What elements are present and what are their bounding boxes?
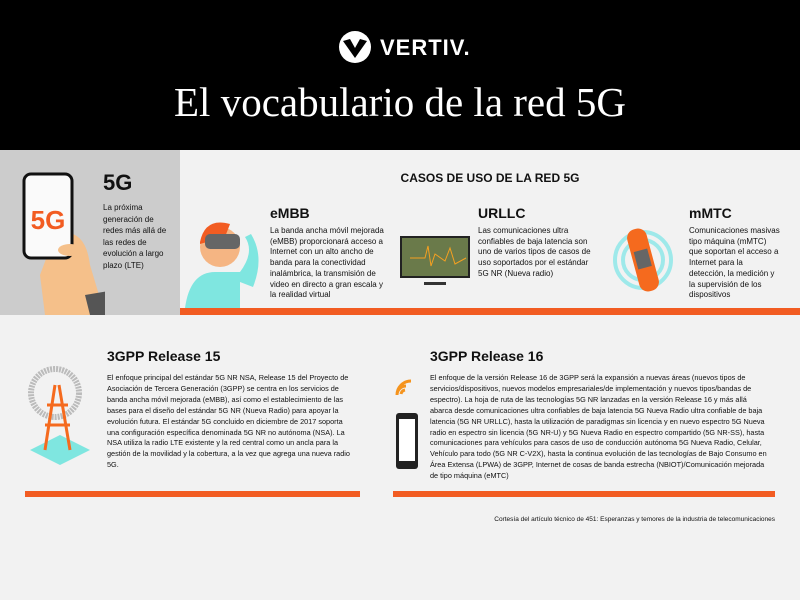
heading: casos: CASOS DE USO DE LA RED 5G — [401, 171, 579, 185]
heading: 5G: 5G — [103, 170, 132, 195]
heading: 3GPP Release 16 — [430, 348, 543, 364]
icon: car with signal rings — [613, 228, 673, 292]
block: eMBB: La banda ancha móvil mejorada (eMBB) proporcionará acceso a Internet con un alto ancho de banda para la conectividad inalámbrica, la transmisión de video en directo a gran escala y la realidad virtual — [270, 226, 384, 299]
header — [0, 0, 800, 150]
text: 5G: La próxima generación de redes más allá de las redes de evolución a largo plazo (LTE) — [103, 203, 166, 270]
heading: 3GPP Release 15 — [107, 348, 220, 364]
text: El enfoque principal del estándar 5G NR NSA, Release 15 del Proyecto de Asociación de Tercera Generación (3GPP) se centra en los servicios de banda ancha móvil mejorada (eMBB), así como el establecimiento de las bases para el diseño del estándar 5G NR (Nueva Radio) para apoyar la evolución futura. El estándar 5G concluido en diciembre de 2017 soporta una configuración específica denominada 5G NR no autónoma (NSA). La NSA utiliza la radio LTE existente y la red central como un ancla para la gestión de la movilidad y la cobertura, a la vez que agrega una nueva radio 5G. — [107, 373, 350, 469]
block: URLLC: URLLC — [478, 205, 525, 221]
block: mMTC: Comunicaciones masivas tipo máquina (mMTC) que soportan el acceso a Internet para la detección, la medición y la supervisión de los dispositivos — [689, 226, 780, 299]
panel: casos de uso — [185, 171, 780, 308]
logo: VERTIV. — [380, 35, 471, 60]
panel: 5G — [0, 150, 180, 315]
panel: release 16 — [393, 348, 775, 497]
text: El enfoque de la versión Release 16 de 3GPP será la expansión a nuevas áreas (nuevos tipos de servicios/dispositivos, nuevos modelos empresariales/de implementación y nuevos tipos/bandas de espectro). La hoja de ruta de las tecnologías 5G NR lanzadas en la versión Release 16 y más allá abarca desde comunicaciones ultra confiables de baja latencia 5G Nueva Radio ultra confiable de baja latencia (5G NR URLLC), hasta la utilización de paradigmas sin licencia y en nuevo espectro 5G Nueva radio en espectro sin licencia (5G NR-U) y 5G Nueva Radio en espectro compartido (5G NR-SS), hasta comunicaciones para vehículos para casos de uso de conducción autónoma 5G Nueva Radio, Celular, Vehículo para todo (5G NR C-V2X), hasta la continua evolución de las tecnologías de Bajo Consumo en Área Extensa (LPWA) de 3GPP, Internet de cosas de banda estrecha (NBIOT)/Comunicación mejorada de tipo máquina (eMTC) — [430, 373, 767, 480]
icon: monitor — [400, 236, 470, 285]
title: El vocabulario de la red 5G — [174, 79, 626, 125]
block: URLLC: Las comunicaciones ultra confiables de baja latencia son uno de varios tipos de casos de uso soportados por el estándar 5G NR (Nueva radio) — [478, 226, 591, 278]
panel: release 15 — [25, 348, 360, 497]
block: mMTC: mMTC — [689, 205, 732, 221]
logo — [339, 31, 471, 63]
icon: wifi and phone — [396, 380, 418, 469]
footer credit: Cortesía del artículo técnico de 451: Esperanzas y temores de la industria de telecomunicaciones — [494, 516, 775, 523]
icon: phone in hand: 5G — [31, 205, 65, 235]
block: eMBB: eMBB — [270, 205, 310, 221]
icon: tower — [28, 366, 90, 465]
icon: VR person — [185, 222, 258, 308]
icon: phone in hand — [22, 172, 105, 315]
